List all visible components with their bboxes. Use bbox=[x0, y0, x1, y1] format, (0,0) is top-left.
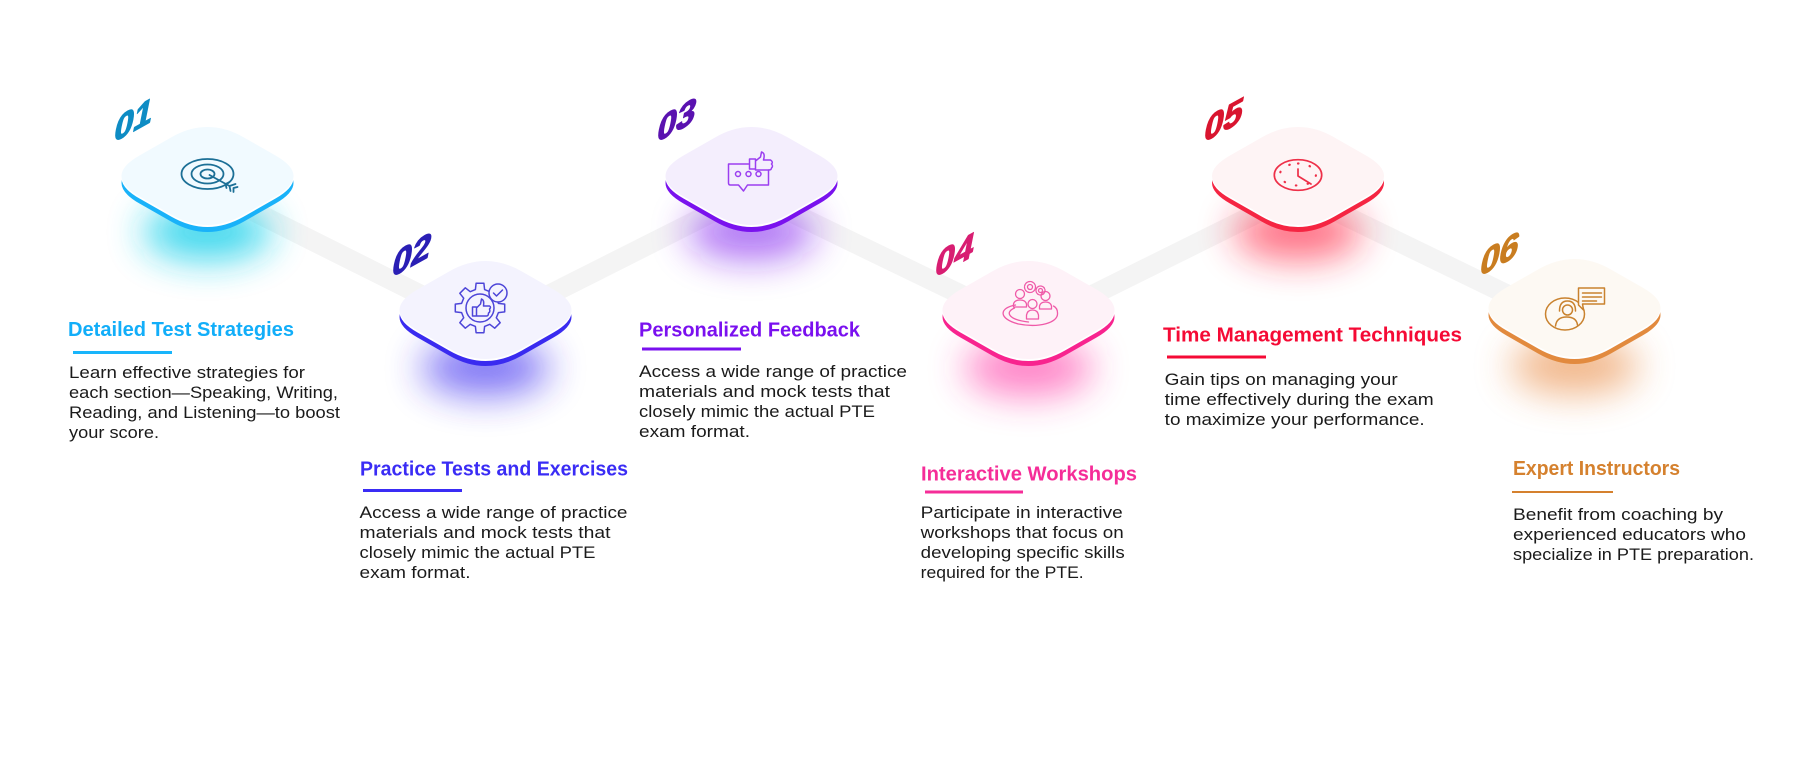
glow bbox=[144, 204, 272, 260]
body: Learn effective strategies for bbox=[69, 363, 305, 382]
body: materials and mock tests that bbox=[639, 382, 890, 401]
body: closely mimic the actual PTE bbox=[639, 402, 875, 421]
body: Gain tips on managing your bbox=[1165, 370, 1398, 389]
diamond platform bbox=[122, 127, 294, 232]
body: exam format. bbox=[639, 422, 750, 441]
number 05: 05 bbox=[1201, 89, 1247, 152]
number 03: 03 bbox=[654, 89, 700, 152]
heading: Expert Instructors bbox=[1513, 458, 1680, 480]
text block: Practice Tests and Exercises bbox=[360, 458, 628, 582]
body bbox=[639, 362, 907, 441]
icon: instructor with speech bubble bbox=[1546, 288, 1604, 330]
step 01 node bbox=[111, 89, 294, 260]
diamond platform bbox=[1212, 127, 1384, 232]
body: Benefit from coaching by bbox=[1513, 505, 1724, 524]
glow bbox=[1510, 338, 1638, 394]
diamond platform bbox=[400, 261, 572, 366]
body: Access a wide range of practice bbox=[639, 362, 907, 381]
number 06: 06 bbox=[1477, 223, 1523, 286]
text block: Expert Instructors bbox=[1512, 458, 1754, 564]
body bbox=[1513, 505, 1754, 564]
body: exam format. bbox=[360, 563, 470, 582]
body: Reading, and Listening—to boost bbox=[69, 403, 340, 422]
body bbox=[360, 503, 628, 582]
body: specialize in PTE preparation. bbox=[1513, 545, 1754, 564]
text block: Time Management Techniques bbox=[1163, 324, 1462, 429]
step 06 node bbox=[1477, 223, 1660, 394]
body: time effectively during the exam bbox=[1165, 390, 1434, 409]
diamond platform bbox=[942, 261, 1114, 366]
icon: target bbox=[182, 159, 238, 192]
body: developing specific skills bbox=[921, 543, 1125, 562]
icon: workshop group bbox=[1003, 282, 1058, 325]
connector path bbox=[207, 188, 1574, 327]
icon: clock bbox=[1274, 160, 1322, 190]
heading: Practice Tests and Exercises bbox=[360, 458, 628, 480]
body bbox=[920, 503, 1125, 582]
body: experienced educators who bbox=[1513, 525, 1746, 544]
heading: Detailed Test Strategies bbox=[68, 319, 294, 341]
number 02: 02 bbox=[389, 224, 435, 287]
diamond platform bbox=[666, 127, 838, 232]
icon: gear with thumbs up bbox=[455, 283, 507, 333]
number 01: 01 bbox=[111, 89, 157, 152]
body: workshops that focus on bbox=[920, 523, 1124, 542]
body: materials and mock tests that bbox=[360, 523, 611, 542]
body: required for the PTE. bbox=[921, 563, 1084, 582]
diamond platform bbox=[1488, 259, 1660, 364]
step 02 node bbox=[389, 224, 572, 396]
glow bbox=[964, 340, 1092, 396]
body bbox=[69, 363, 340, 442]
heading: Time Management Techniques bbox=[1163, 324, 1462, 346]
underline bbox=[73, 351, 172, 354]
body: Participate in interactive bbox=[921, 503, 1123, 522]
glow bbox=[422, 340, 550, 396]
number 04: 04 bbox=[932, 224, 978, 287]
glow bbox=[688, 204, 816, 260]
underline bbox=[1167, 356, 1266, 358]
underline bbox=[642, 348, 741, 350]
text block: Detailed Test Strategies bbox=[68, 319, 340, 442]
icon: feedback bubble with thumb bbox=[728, 152, 772, 191]
body: to maximize your performance. bbox=[1165, 410, 1425, 429]
glow bbox=[1234, 204, 1362, 260]
text block: Interactive Workshops bbox=[920, 464, 1137, 582]
body: your score. bbox=[69, 423, 159, 442]
underline bbox=[1512, 491, 1613, 493]
step 03 node bbox=[654, 89, 838, 260]
heading: Interactive Workshops bbox=[921, 464, 1137, 486]
heading: Personalized Feedback bbox=[639, 320, 861, 342]
step 04 node bbox=[932, 224, 1114, 396]
text block: Personalized Feedback bbox=[639, 320, 907, 441]
body: each section—Speaking, Writing, bbox=[69, 383, 338, 402]
body: Access a wide range of practice bbox=[360, 503, 628, 522]
body bbox=[1165, 370, 1434, 429]
underline bbox=[363, 489, 462, 492]
underline bbox=[925, 490, 1023, 494]
body: closely mimic the actual PTE bbox=[360, 543, 596, 562]
step 05 node bbox=[1201, 89, 1384, 260]
